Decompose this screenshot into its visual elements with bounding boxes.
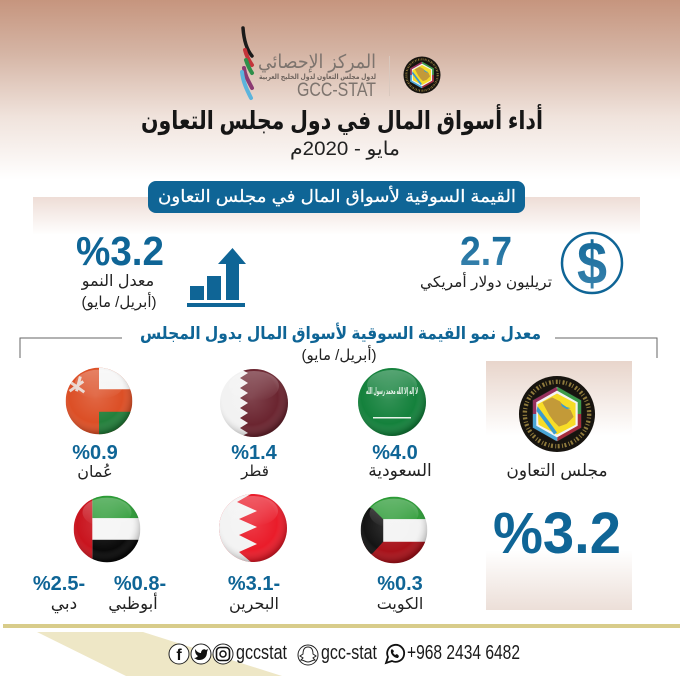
bracket frame: [20, 338, 657, 358]
value 2.7: 2.7: [460, 228, 512, 274]
icon: whatsapp: [386, 645, 404, 663]
icon: instagram: [213, 644, 233, 664]
flag: Qatar: [220, 369, 288, 437]
Dubai name: دبي: [51, 594, 77, 614]
panel: GCC total: [486, 361, 632, 610]
icon: GCC emblem large: [519, 376, 595, 452]
footer gold bar: [3, 624, 680, 628]
Qatar value: %1.4: [231, 442, 278, 464]
stat: Qatar: [231, 442, 278, 480]
panel value: %3.2: [493, 501, 621, 566]
panel name: مجلس التعاون: [506, 461, 608, 480]
Saudi name: السعودية: [368, 461, 432, 480]
section period: (أبريل/ مايو): [301, 345, 377, 364]
title: أداء أسواق المال في دول مجلس التعاون: [141, 104, 543, 136]
Saudi value: %4.0: [372, 442, 418, 464]
section heading pill: [148, 181, 525, 213]
flag: Bahrain: [219, 494, 287, 562]
Kuwait value: %0.3: [377, 573, 423, 595]
text: لا إله إلا الله محمد رسول الله: [366, 386, 418, 397]
flag: Saudi Arabia: [358, 368, 426, 436]
section heading: member states: معدل نمو القيمة السوقية لأسواق المال بدول المجلس: [140, 323, 541, 344]
logo: GCC-STAT: [242, 28, 376, 101]
icon: dollar coin: $: [577, 230, 607, 297]
flag: UAE: [74, 496, 140, 562]
phone number: +968 2434 6482: [407, 642, 520, 664]
background header gradient: [0, 0, 680, 180]
Oman value: %0.9: [72, 442, 118, 464]
flag: Kuwait: [361, 497, 427, 563]
stat: Oman: [72, 442, 118, 481]
value 3.2%: %3.2: [76, 228, 164, 274]
flag: Oman: [66, 368, 132, 434]
footer contact row: [169, 642, 520, 665]
handle gccstat: gccstat: [236, 642, 287, 664]
icon: dollar coin: [562, 230, 622, 297]
handle gcc-stat: gcc-stat: [321, 642, 377, 664]
subtitle: date: مايو - 2020م: [290, 139, 400, 160]
pill label: القيمة السوقية لأسواق المال في مجلس التعاون: [158, 186, 516, 207]
stat: Kuwait: [377, 573, 423, 614]
stat: Abu Dhabi: [108, 573, 166, 614]
logo divider: [389, 56, 390, 96]
icon: facebook: f: [176, 647, 182, 664]
logo Arabic subtitle: لدول مجلس التعاون لدول الخليج العربية: [259, 74, 376, 81]
Kuwait name: الكويت: [377, 596, 423, 614]
stat: Bahrain: [228, 573, 280, 614]
icon: facebook: [169, 644, 189, 664]
growth period: (أبريل/ مايو): [81, 292, 157, 311]
value caption: تريليون دولار أمريكي: [420, 272, 552, 292]
logo GCC-STAT wordmark: GCC-STAT: [297, 80, 376, 101]
icon: GCC emblem small: [403, 56, 441, 94]
stat: Dubai: [33, 573, 85, 614]
growth caption: معدل النمو: [81, 273, 154, 291]
Oman name: عُمان: [77, 463, 113, 481]
icon: snapchat: [298, 645, 318, 665]
Abu Dhabi value: %0.8-: [114, 573, 166, 595]
Bahrain name: البحرين: [229, 596, 279, 614]
Abu Dhabi name: أبوظبي: [108, 592, 158, 614]
Qatar name: قطر: [240, 463, 269, 480]
stat: growth rate: [76, 228, 164, 311]
logo ribbon stripes: [242, 28, 252, 98]
stat: Saudi Arabia: [368, 442, 432, 480]
icon: growth bars with arrow: [187, 248, 246, 307]
footer decorative shape: [37, 632, 282, 676]
panel band: [33, 197, 640, 235]
icon: twitter: [191, 644, 211, 664]
logo Arabic name: المركز الإحصائي: [258, 52, 376, 73]
Dubai value: %2.5-: [33, 573, 85, 595]
stat: market value: [420, 228, 552, 292]
Bahrain value: %3.1-: [228, 573, 280, 595]
